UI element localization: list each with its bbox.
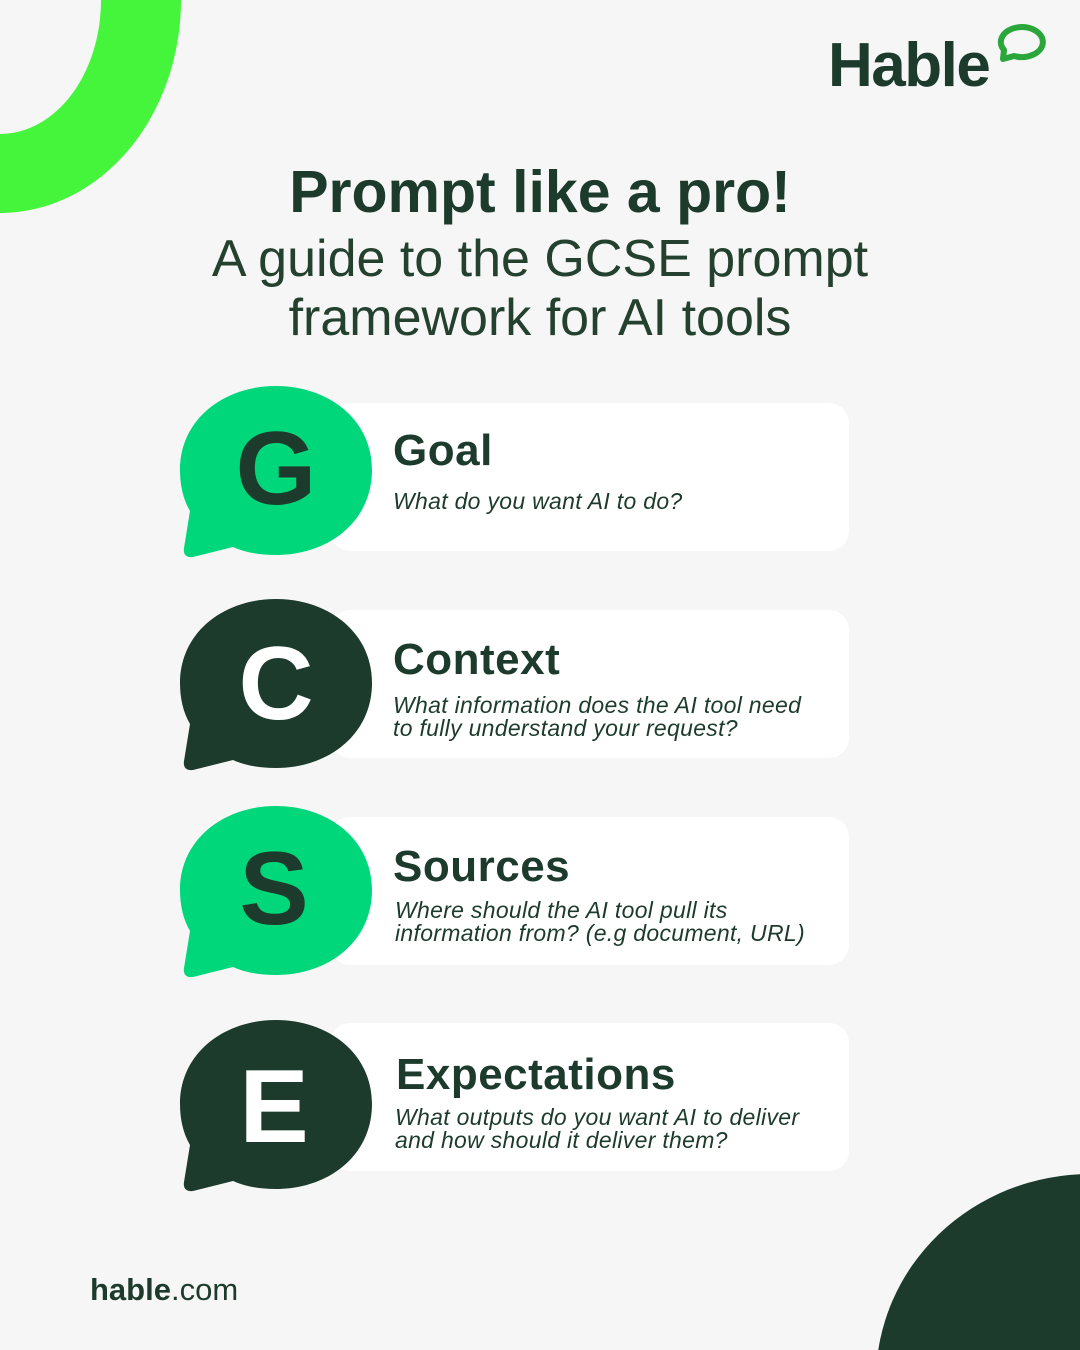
row: Context: What information does the AI tool need	[393, 692, 801, 718]
row: Sources: information from? (e.g document, URL)	[395, 920, 805, 946]
row: Sources: Where should the AI tool pull its	[395, 897, 728, 923]
row: Expectations: What outputs do you want AI to deliver	[395, 1104, 799, 1130]
decorative arc top-left	[0, 0, 181, 213]
subtitle: A guide to the GCSE prompt	[212, 230, 868, 288]
icon: S bubble: S	[239, 831, 309, 947]
row: Goal: Goal	[393, 426, 493, 475]
subtitle: framework for AI tools	[289, 289, 791, 347]
subtitle	[212, 230, 868, 347]
icon: speech bubble	[998, 24, 1046, 62]
row: Sources: Sources	[393, 842, 570, 891]
row: Context	[180, 599, 849, 770]
icon: S bubble	[180, 806, 372, 978]
icon: C bubble	[180, 599, 372, 770]
row: Expectations	[180, 1020, 849, 1192]
logo	[828, 24, 1046, 100]
icon: E bubble: E	[239, 1049, 309, 1165]
footer url: hable.com	[90, 1272, 238, 1307]
row: Context: Context	[393, 635, 560, 684]
row: Expectations: Expectations	[396, 1050, 676, 1099]
row: Goal: What do you want AI to do?	[393, 488, 683, 514]
title: Prompt like a pro!	[289, 159, 791, 225]
row: Context: to fully understand your request?	[393, 715, 738, 741]
row: Sources	[180, 806, 849, 978]
icon: G bubble	[180, 386, 372, 558]
logo: Hable	[828, 31, 989, 100]
icon: E bubble	[180, 1020, 372, 1192]
decorative shape bottom-right	[878, 1174, 1080, 1350]
row: Expectations: and how should it deliver them?	[395, 1127, 728, 1153]
row: Goal	[180, 386, 849, 558]
icon: G bubble: G	[236, 411, 316, 527]
icon: C bubble: C	[238, 626, 314, 742]
